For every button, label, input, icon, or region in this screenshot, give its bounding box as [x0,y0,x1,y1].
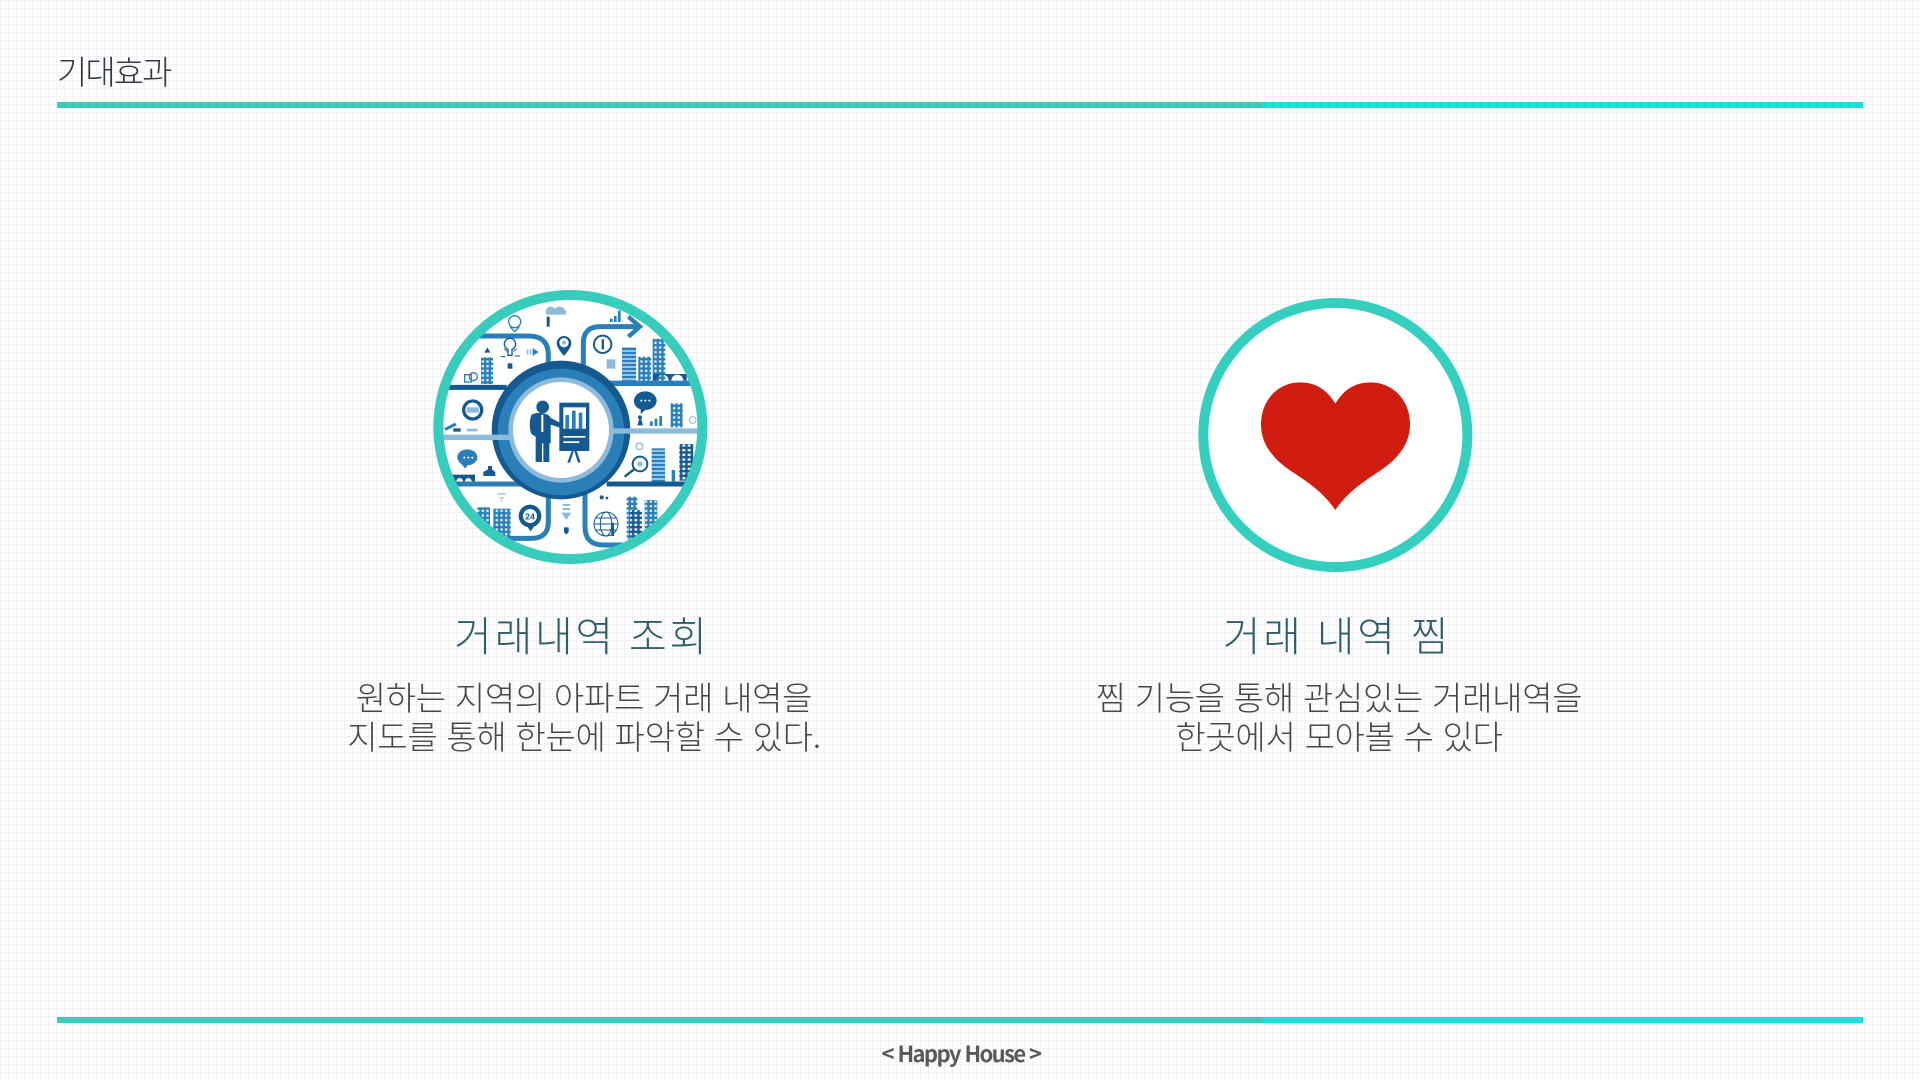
description: transaction favourites: 찜 기능을 통해 관심있는 거래내역을 [1096,672,1582,720]
icon: heart circle [1198,298,1472,572]
footer text: < Happy House > [882,1037,1040,1069]
icon: smart city presentation circle [433,290,708,564]
title: 기대효과 [57,46,170,94]
description: transaction favourites: 한곳에서 모아볼 수 있다 [1175,711,1503,759]
city scenes: 24 [525,511,535,521]
top divider bar [57,102,1863,108]
description: transaction lookup: 지도를 통해 한눈에 파악할 수 있다. [347,711,821,759]
presenter figure [530,401,589,463]
description: transaction favourites [1096,672,1582,759]
bottom divider bar [57,1017,1863,1023]
heading: transaction favourites: 거래 내역 찜 [1223,603,1451,663]
heart [1261,382,1410,510]
description: transaction lookup: 원하는 지역의 아파트 거래 내역을 [356,672,812,720]
teal circle border [438,295,702,559]
central hub ring [492,361,631,499]
heading: transaction lookup: 거래내역 조회 [454,603,710,663]
city scenes [444,307,696,540]
description: transaction lookup [347,672,821,759]
